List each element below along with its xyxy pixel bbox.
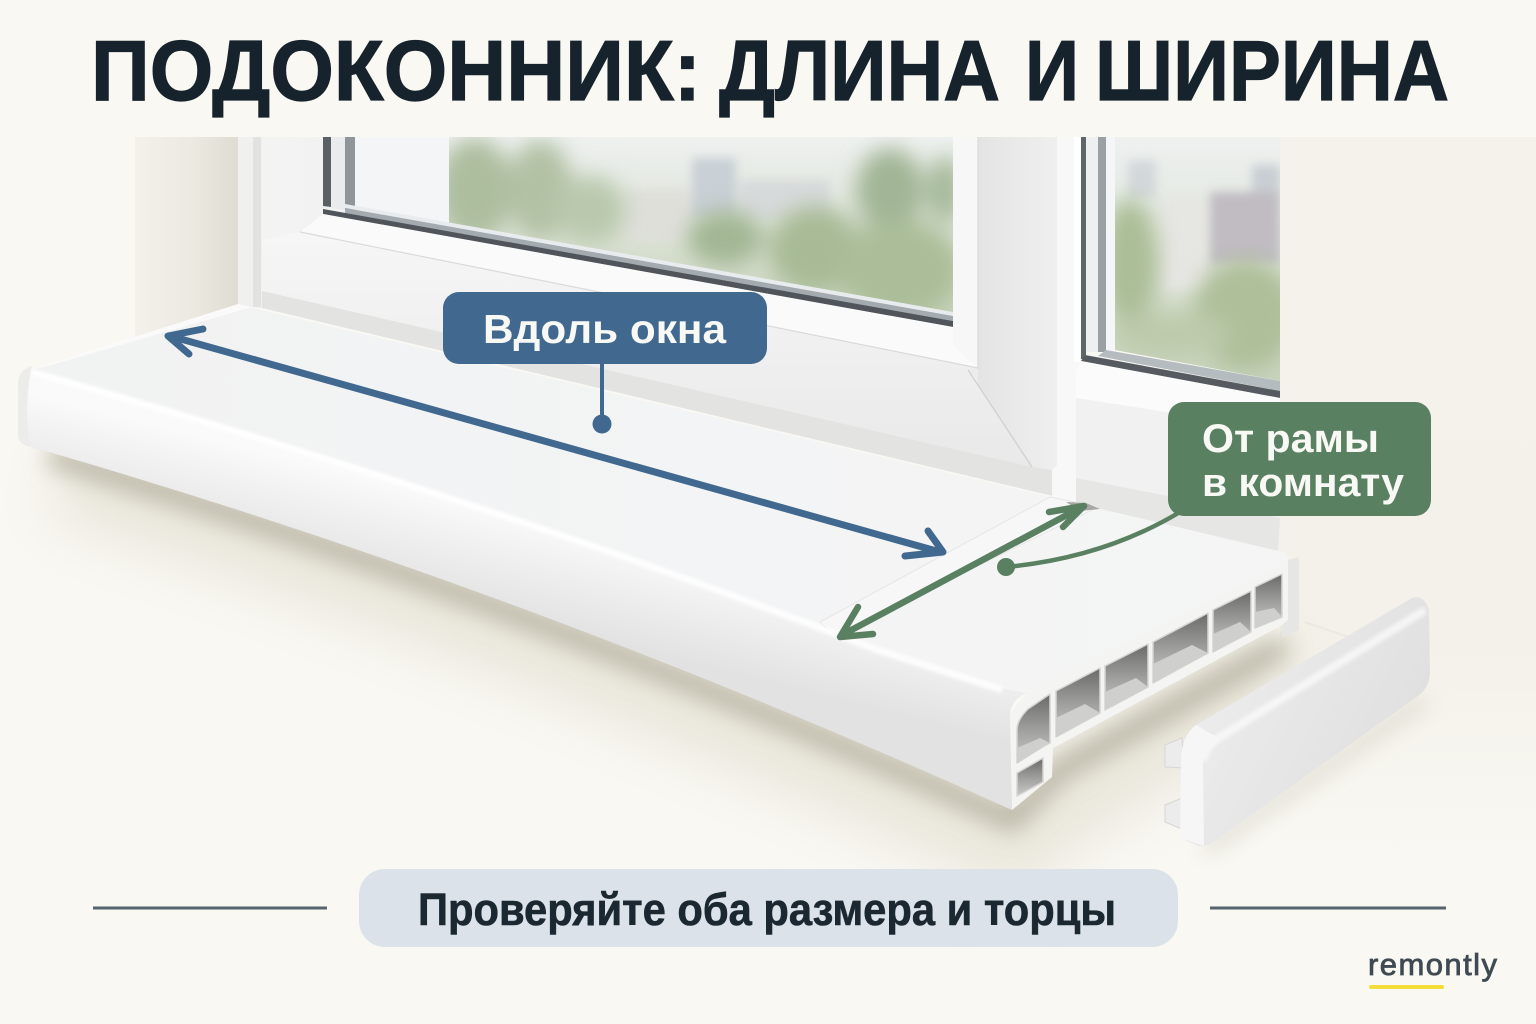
sill top surface [32,305,1288,693]
title [91,24,1449,119]
glass beads main [323,137,331,207]
shadow under sill [50,455,1425,850]
label: from frame into room: От рамы [1202,417,1379,461]
seal strip [262,291,1057,497]
width strip [820,497,1098,636]
end cap [1165,597,1430,846]
label: along the window [443,292,767,434]
right glass [1115,137,1280,381]
right glass beads [1081,137,1086,359]
sill front nose [25,370,1027,810]
chamber lower facets [1017,608,1282,763]
lower sash rail [300,214,978,368]
cap body [1180,597,1430,846]
pointer to arrow [600,360,604,424]
post [1052,137,1081,503]
left window reveal [135,137,240,338]
title: ДЛИНА [719,24,1000,119]
arrow: length along window [168,329,943,556]
window frame [238,137,1297,552]
left end trim [18,366,32,447]
end face [1010,557,1299,810]
title: ШИРИНА [1095,24,1449,119]
title: ПОДОКОННИК: [91,24,701,119]
logo: remontly: remontly [1368,947,1498,982]
label: from frame into room: в комнату [1202,461,1405,505]
right lower rail [1076,361,1280,430]
bottom note [93,869,1446,947]
connector curve [1006,512,1180,567]
label: along the window: Вдоль окна [483,306,727,352]
bottom note: Проверяйте оба размера и торцы [418,884,1116,935]
label: from frame into room [997,402,1431,576]
arrow: width from frame [840,506,1084,637]
windowsill [18,304,1299,810]
main sash [262,137,1057,480]
cap tabs [1165,738,1184,768]
hollow chambers [1017,574,1282,796]
outer frame strip [238,137,262,308]
title: И [1025,24,1079,119]
view through main glass [449,137,953,312]
